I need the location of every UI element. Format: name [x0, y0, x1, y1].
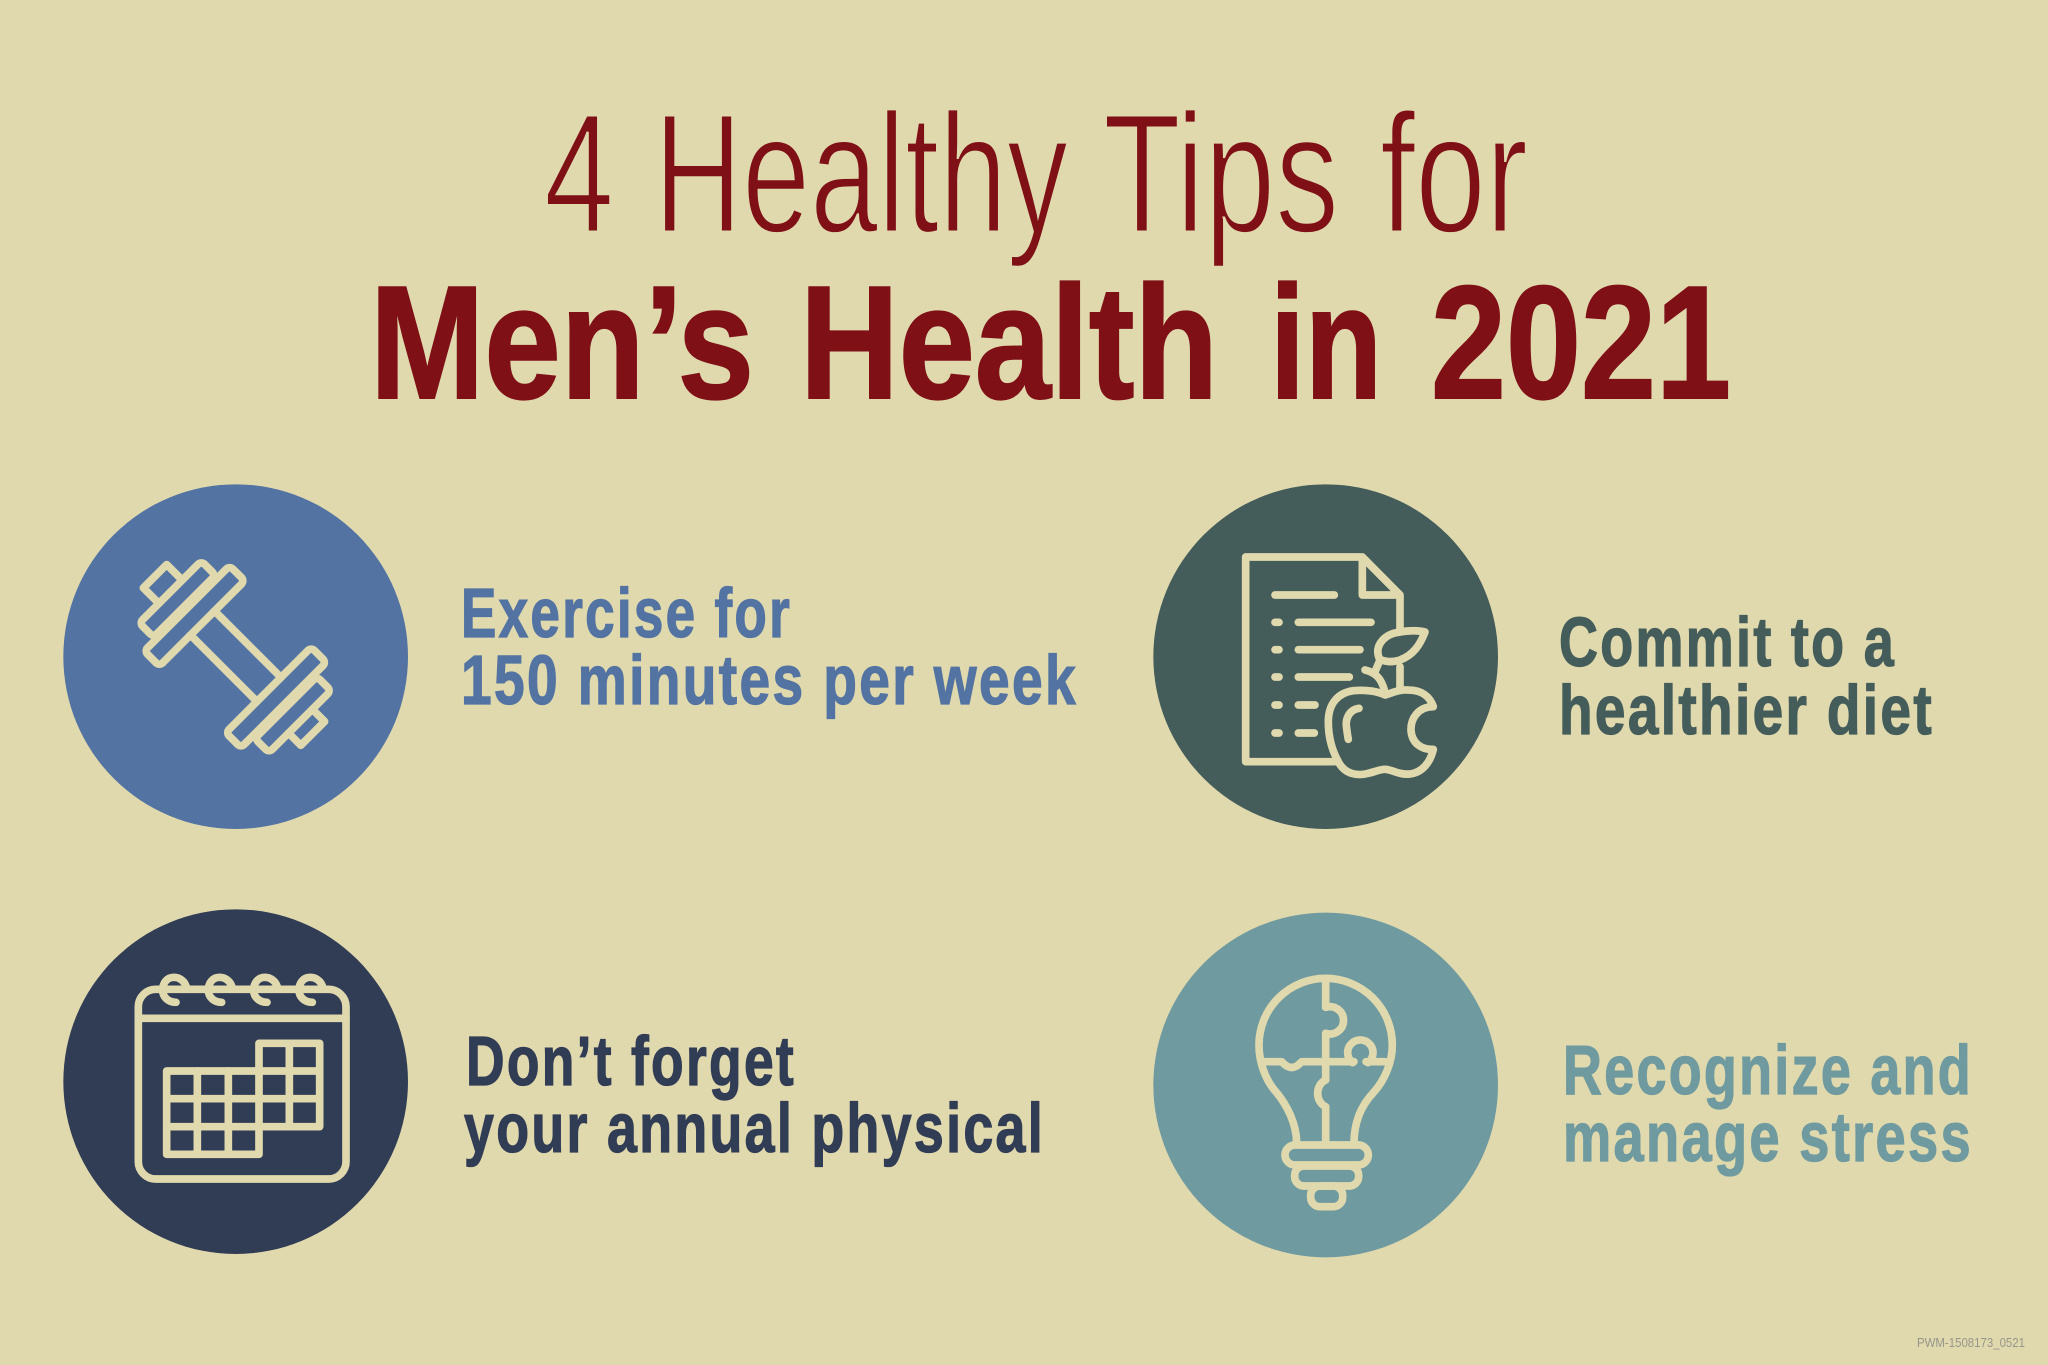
- title line 2: Health: [800, 253, 1218, 433]
- title line 1: Healthy: [654, 79, 1068, 269]
- panel: exercise tip: [63, 484, 1078, 829]
- icon: puzzle light bulb in teal circle: [1153, 913, 1498, 1257]
- tip text: exercise: Exercise for: [461, 574, 792, 652]
- panel: stress tip: [1153, 913, 1973, 1257]
- title line 1: Tips: [1103, 79, 1339, 269]
- tip text: diet: [1559, 603, 1934, 749]
- title line 1: 4: [544, 79, 614, 269]
- tip text: physical: Don’t forget: [466, 1022, 796, 1100]
- footer code: PWM-1508173_0521: [1917, 1336, 2025, 1350]
- title line 2: 2021: [1431, 253, 1731, 433]
- icon: calendar in navy circle: [63, 909, 408, 1254]
- title line 2: [370, 253, 1731, 433]
- title: [370, 79, 1731, 433]
- icon: document and apple in green circle: [1153, 484, 1498, 829]
- panel: diet tip: [1153, 484, 1934, 829]
- icon: dumbbell in blue circle: [63, 484, 408, 829]
- tip text: physical: [464, 1022, 1045, 1167]
- tip text: exercise: [461, 574, 1078, 719]
- tip text: diet: Commit to a: [1559, 603, 1896, 681]
- title line 2: Men’s: [370, 253, 754, 433]
- tip text: physical: your annual physical: [464, 1089, 1045, 1167]
- tip text: diet: healthier diet: [1559, 671, 1934, 749]
- title line 1: for: [1380, 79, 1528, 269]
- tip text: stress: [1563, 1031, 1973, 1176]
- tip text: exercise: 150 minutes per week: [461, 641, 1078, 719]
- panel: annual physical tip: [63, 909, 1045, 1254]
- title line 2: in: [1270, 253, 1382, 433]
- title line 1: [544, 79, 1528, 269]
